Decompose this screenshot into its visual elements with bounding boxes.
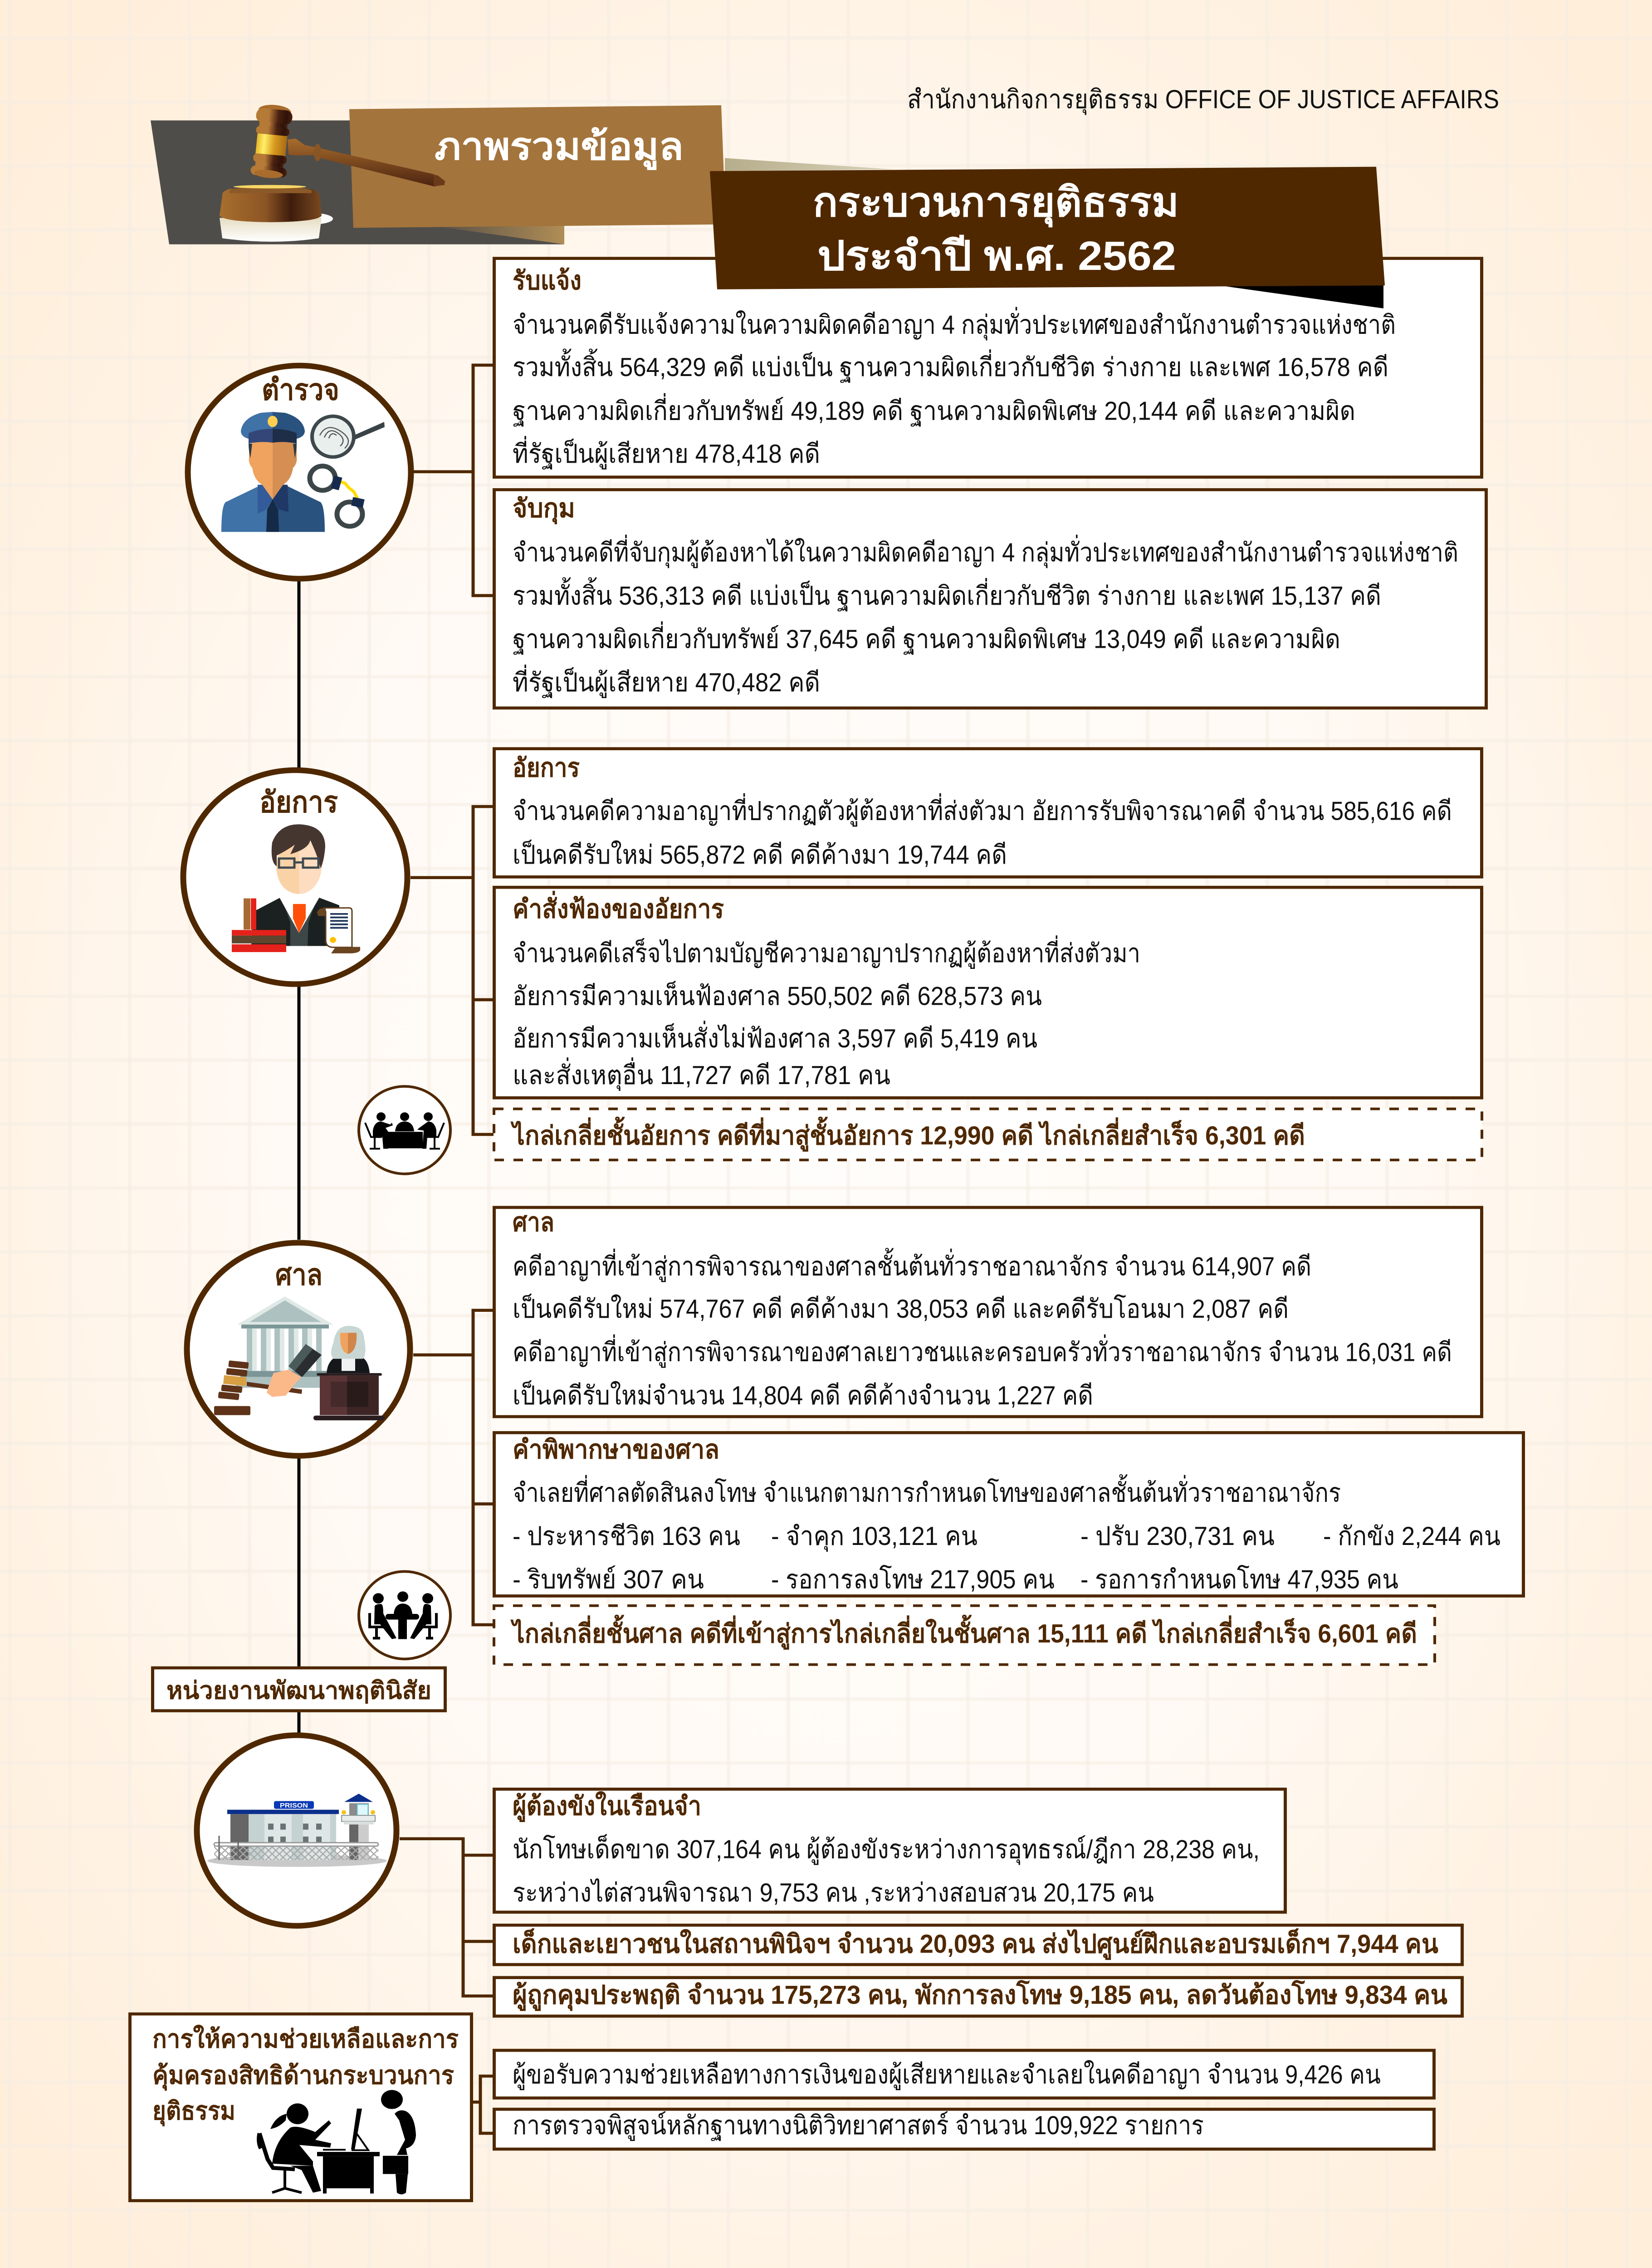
icon: police officer (221, 412, 325, 532)
icon: handcuffs (310, 466, 365, 526)
panel: forensic examination: การตรวจพิสูจน์หลักฐานทางนิติวิทยาศาสตร์ จำนวน 109,922 รายการ (513, 2111, 1204, 2141)
organisation name: สำนักงานกิจการยุติธรรม OFFICE OF JUSTICE AFFAIRS (907, 85, 1499, 115)
body text: เป็นคดีรับใหม่จำนวน 14,804 คดี คดีค้างจำนวน 1,227 คดี (513, 1380, 1093, 1410)
callout: court mediation: ไกล่เกลี่ยชั้นศาล คดีที่เข้าสู่การไกล่เกลี่ยในชั้นศาล 15,111 คดี ไกล่เกลี่ยสำเร็จ 6,601 คดี (510, 1615, 1417, 1650)
panel: juvenile detention (494, 1925, 1462, 1965)
icon: magnifying glass (312, 416, 385, 457)
body text: รวมทั้งสิ้น 564,329 คดี แบ่งเป็น ฐานความผิดเกี่ยวกับชีวิต ร่างกาย และเพศ 16,578 คดี (513, 348, 1388, 383)
heading: ศาล (275, 1259, 323, 1291)
icon: mediation meeting (court) (359, 1571, 450, 1659)
body text: จำเลยที่ศาลตัดสินลงโทษ จำแนกตามการกำหนดโทษของศาลชั้นต้นทั่วราชอาณาจักร (513, 1474, 1341, 1507)
body text: เป็นคดีรับใหม่ 574,767 คดี คดีค้างมา 38,053 คดี และคดีรับโอนมา 2,087 คดี (513, 1293, 1289, 1324)
callout: prosecutor mediation: ไกล่เกลี่ยชั้นอัยการ คดีที่มาสู่ชั้นอัยการ 12,990 คดี ไกล่เกลี่ยสำเร็จ 6,301 คดี (510, 1116, 1305, 1152)
icon: court building (236, 1296, 333, 1388)
panel: prosecutor (494, 749, 1481, 877)
connector: assistance (473, 2076, 494, 2133)
icon: books (232, 899, 286, 952)
heading: คำพิพากษาของศาล (513, 1435, 719, 1464)
body text: จำนวนคดีเสร็จไปตามบัญชีความอาญาปรากฏผู้ต้องหาที่ส่งตัวมา (513, 935, 1140, 969)
body text: คดีอาญาที่เข้าสู่การพิจารณาของศาลเยาวชนและครอบครัวทั่วราชอาณาจักร จำนวน 16,031 คดี (513, 1334, 1452, 1368)
heading: การให้ความช่วยเหลือและการ (152, 2024, 459, 2053)
callout: prosecutor mediation (494, 1109, 1482, 1160)
panel: probation: ผู้ถูกคุมประพฤติ จำนวน 175,273 คน, พักการลงโทษ 9,185 คน, ลดวันต้องโทษ 9,834 คน (513, 1980, 1447, 2011)
heading: คุ้มครองสิทธิด้านกระบวนการ (152, 2062, 455, 2091)
icon: gavel (220, 103, 445, 242)
heading: ตำรวจ (262, 374, 339, 406)
panel: arrests (494, 490, 1486, 708)
node: police (188, 366, 411, 579)
sentence list: - รอการลงโทษ 217,905 คน (771, 1564, 1055, 1594)
panel: forensic examination (494, 2109, 1434, 2149)
connector: corrections (400, 1839, 494, 1996)
body text (513, 793, 1452, 870)
connector: police (414, 365, 494, 596)
body text: ที่รัฐเป็นผู้เสียหาย 470,482 คดี (513, 664, 820, 698)
sentence list: - ปรับ 230,731 คน (1080, 1522, 1275, 1551)
body text: ที่รัฐเป็นผู้เสียหาย 478,418 คดี (513, 435, 820, 469)
node: court (187, 1243, 410, 1456)
body text: เป็นคดีรับใหม่ 565,872 คดี คดีค้างมา 19,744 คดี (513, 839, 1007, 870)
icon: prison (207, 1794, 387, 1867)
body text: จำนวนคดีความอาญาที่ปรากฏตัวผู้ต้องหาที่ส่งตัวมา อัยการรับพิจารณาคดี จำนวน 585,616 คดี (513, 793, 1452, 826)
sentence list: - ริบทรัพย์ 307 คน (513, 1565, 704, 1594)
panel: court (494, 1207, 1481, 1417)
sentence list: - รอการกำหนดโทษ 47,935 คน (1080, 1564, 1398, 1594)
label: behaviour development agencies (152, 1668, 445, 1711)
body text: และสั่งเหตุอื่น 11,727 คดี 17,781 คน (513, 1057, 890, 1091)
icon: prison: PRISON (280, 1802, 308, 1809)
heading: ผู้ต้องขังในเรือนจำ (513, 1791, 701, 1822)
body text: นักโทษเด็ดขาด 307,164 คน ผู้ต้องขังระหว่างการอุทธรณ์/ฎีกา 28,238 คน, (513, 1834, 1260, 1865)
panel: juvenile detention: เด็กและเยาวชนในสถานพินิจฯ จำนวน 20,093 คน ส่งไปศูนย์ฝึกและอบรมเด็กฯ 7,944 คน (513, 1928, 1438, 1960)
heading: จับกุม (513, 494, 575, 525)
body text: ฐานความผิดเกี่ยวกับทรัพย์ 37,645 คดี ฐานความผิดพิเศษ 13,049 คดี และความผิด (513, 621, 1340, 655)
panel: victim compensation (494, 2050, 1434, 2098)
body text (513, 534, 1458, 698)
panel: report received (494, 259, 1481, 477)
panel: court judgments (494, 1432, 1523, 1596)
body text: จำนวนคดีที่จับกุมผู้ต้องหาได้ในความผิดคดีอาญา 4 กลุ่มทั่วประเทศของสำนักงานตำรวจแห่งชาติ (513, 534, 1458, 568)
icon: mediation meeting (prosecutor) (359, 1086, 450, 1174)
panel: probation (494, 1978, 1462, 2016)
timeline spine (298, 582, 300, 1733)
body text (513, 1248, 1452, 1410)
icon: scroll (317, 908, 360, 953)
body text: ฐานความผิดเกี่ยวกับทรัพย์ 49,189 คดี ฐานความผิดพิเศษ 20,144 คดี และความผิด (513, 393, 1355, 426)
title banner (151, 103, 894, 244)
label: behaviour development agencies: หน่วยงานพัฒนาพฤตินิสัย (166, 1677, 431, 1704)
sentence list (513, 1522, 1500, 1594)
callout: court mediation (494, 1606, 1435, 1665)
body text: อัยการมีความเห็นฟ้องศาล 550,502 คดี 628,573 คน (513, 981, 1042, 1011)
heading (152, 2024, 459, 2126)
body text (513, 307, 1396, 469)
node: corrections (197, 1735, 396, 1926)
node: prosecutor (183, 770, 407, 984)
connector: court (413, 1310, 494, 1625)
sentence list: - กักขัง 2,244 คน (1323, 1522, 1500, 1551)
connector: prosecutor (411, 807, 494, 1134)
body text: จำนวนคดีรับแจ้งความในความผิดคดีอาญา 4 กลุ่มทั่วประเทศของสำนักงานตำรวจแห่งชาติ (513, 307, 1396, 341)
body text (513, 935, 1140, 1091)
heading: รับแจ้ง (513, 266, 582, 295)
heading lines (813, 180, 1179, 279)
sentence list: - จำคุก 103,121 คน (771, 1522, 978, 1552)
title banner: justice process 2562 (710, 167, 1385, 308)
icon: prosecutor figure (251, 824, 339, 946)
panel: prosecution orders (494, 887, 1481, 1098)
heading: overview: ภาพรวมข้อมูล (435, 125, 684, 170)
heading: คำสั่งฟ้องของอัยการ (513, 891, 724, 924)
heading: อัยการ (513, 753, 580, 782)
icon: office consultation (259, 2090, 416, 2195)
heading: ศาล (513, 1208, 554, 1237)
body text: รวมทั้งสิ้น 536,313 คดี แบ่งเป็น ฐานความผิดเกี่ยวกับชีวิต ร่างกาย และเพศ 15,137 คดี (513, 577, 1381, 611)
body text: ระหว่างไต่สวนพิจารณา 9,753 คน ,ระหว่างสอบสวน 20,175 คน (513, 1878, 1154, 1907)
heading lines: กระบวนการยุติธรรม (813, 180, 1179, 228)
body text: อัยการมีความเห็นสั่งไม่ฟ้องศาล 3,597 คดี 5,419 คน (513, 1020, 1037, 1053)
panel: inmates (494, 1789, 1285, 1912)
panel: assistance and rights protection (130, 2014, 472, 2201)
heading lines: ประจำปี พ.ศ. 2562 (817, 234, 1176, 279)
icon: judge (313, 1326, 385, 1420)
heading: อัยการ (259, 786, 338, 819)
icon: gavel and hand (214, 1344, 322, 1415)
heading: ยุติธรรม (152, 2097, 235, 2126)
body text (513, 1834, 1260, 1907)
sentence list: - ประหารชีวิต 163 คน (513, 1522, 740, 1551)
panel: victim compensation: ผู้ขอรับความช่วยเหลือทางการเงินของผู้เสียหายและจำเลยในคดีอาญา จำนวน 9,426 คน (513, 2060, 1381, 2090)
body text: คดีอาญาที่เข้าสู่การพิจารณาของศาลชั้นต้นทั่วราชอาณาจักร จำนวน 614,907 คดี (513, 1248, 1311, 1282)
